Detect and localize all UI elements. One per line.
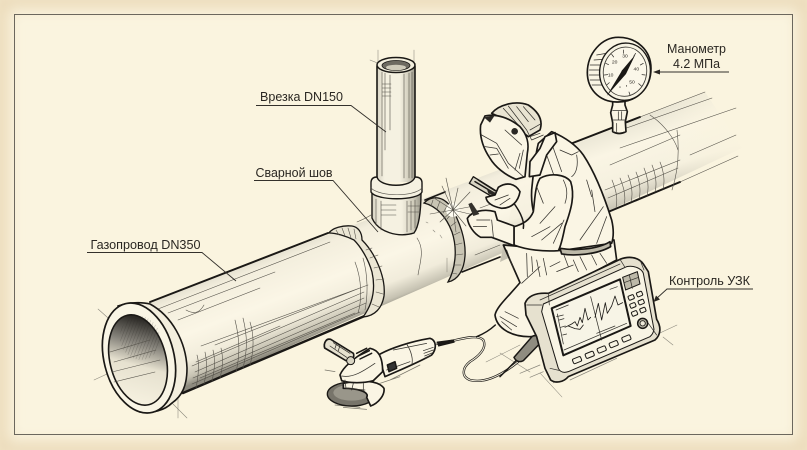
pipe right fade [660,85,750,195]
branch riser [377,66,415,182]
detector front buttons [572,335,631,364]
branch top opening [377,58,415,72]
flange and pipe opening [91,295,187,421]
detector inner bezel [542,266,654,372]
grinder guard [343,381,384,406]
grinder motor [378,338,435,377]
label: main pipeline: Газопровод DN350 [90,237,200,252]
gauge scale numbers: 50 [629,80,635,86]
welding helmet [480,115,528,179]
detector knob [638,318,648,328]
label: weld seam: Сварной шов [256,165,333,180]
probe handle [514,336,542,362]
gauge case [587,37,651,102]
torch cable [510,198,524,228]
welding torch [469,177,500,198]
angle grinder [324,325,518,409]
detector screen [552,279,631,355]
gauge scale numbers: 20 [612,59,618,65]
bore hatching [115,312,165,364]
detector body [525,257,660,382]
label: main pipeline [87,237,236,281]
pressure gauge [587,37,654,133]
gauge scale numbers [608,53,639,86]
gas pipeline DN350 [150,85,750,393]
flange rim [118,303,187,413]
grinder side handle [324,339,354,361]
label: branch [256,89,386,132]
lower glove [467,210,514,246]
label: weld seam [254,165,378,232]
construction lines [94,50,677,418]
gauge scale numbers: 40 [634,67,639,73]
label: branch: Врезка DN150 [260,89,343,104]
gauge scale numbers: 10 [608,73,614,79]
pipe bore [100,309,176,411]
label: ultrasonic testing: Контроль УЗК [669,273,750,288]
weld seam right [424,198,465,282]
weld seam left [329,226,384,317]
welder torso [532,132,613,251]
detector side keypad [623,272,646,316]
pipe outline [150,117,680,393]
helmet pivot [511,128,518,135]
reinforcement collar body [372,192,421,235]
welder leg and trousers [495,240,617,337]
pipe body [150,92,742,393]
flange front face [91,295,187,421]
gauge stem [611,100,627,133]
gauge face [596,40,654,104]
label: pressure gauge: Манометр [667,41,726,56]
probe cable [500,361,516,377]
welder [467,103,617,337]
grinder gearbox [340,348,383,383]
welder collar [529,133,557,177]
branch hatching [382,72,412,178]
welder sleeve [514,175,573,251]
pipe right section shading [500,92,742,262]
detector ground shadow [520,358,617,380]
A-scan waveform right [595,296,623,320]
branch DN150 [357,58,422,275]
welder cap and hair [492,103,541,137]
gauge needle [607,55,635,96]
pipe hatching [158,115,680,388]
grinder disc [327,382,376,406]
arrow to gauge [653,70,729,74]
upper glove [486,184,520,208]
gauge ticks [604,50,645,95]
weld sparks [426,178,478,272]
collar ring [371,177,422,199]
inspection tool [468,203,479,216]
ultrasonic flaw detector [500,257,660,382]
grinder shadow [325,365,420,409]
label: pressure gauge: 4.2 МПа [673,56,721,71]
grinder cord [436,337,518,381]
pipe fading ends [615,92,738,182]
gauge scale numbers: 30 [622,53,628,59]
label: ultrasonic testing [654,273,753,302]
A-scan waveform left [565,308,591,329]
welding belt [560,242,611,255]
label: pressure gauge [653,41,729,74]
